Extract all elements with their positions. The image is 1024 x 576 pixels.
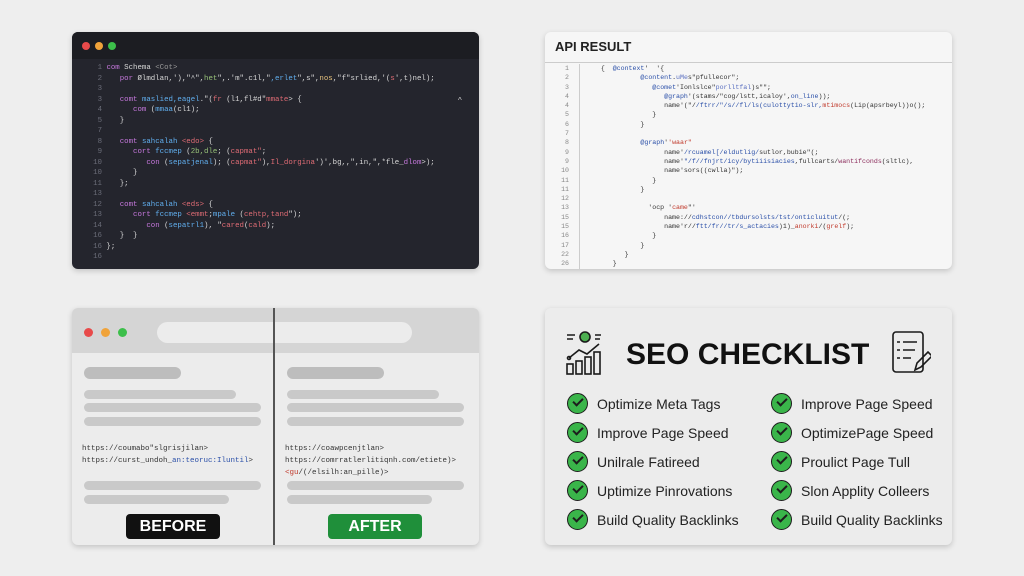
panel: API result: { @context' '{ @content.uMes"pfullecor"; @comet'Ionlslce"porlltfal)s""; @graph'(stams/"cog/lstt,icaloy',on_line)); name'("//ftrr/"/s//fl/ls(culottytio-slr,mtimocs(Lip(apsrbeyl))o(); } } @graph''waar" name'/rcuamel[/eldutlig/sutlor,bubie"(; name'"/f//fnjrt/icy/bytiiisiacies,fullcarts/wantifconds(sltlc), name'sors((cwlla)"); } } 'ocp 'came"' name://cdhstcon//tbdursolsts/tst/onticluitut/(; name'r//ftt/fr//tr/s_actacies)1)_anorki/(grelf); } } } } — [585, 65, 925, 267]
checklist left column: Build Quality Backlinks — [597, 512, 739, 528]
checklist right column: OptimizePage Speed — [801, 425, 933, 441]
panel: code editor: 1 2 3 3 4 5 7 8 9 10 10 11 13 12 13 14 16 16 16 — [93, 64, 102, 261]
panel: before/after browser — [72, 308, 479, 545]
after urls: https://coawpcenjtlan> https://comrratlerlitiqnh.com/etiete)> <gu/(/elsilh:an_pille)> — [285, 445, 456, 477]
browser top bar — [72, 308, 479, 353]
JSON code text — [561, 65, 925, 267]
panel: API result: 1 2 3 4 4 5 6 7 8 9 9 10 11 11 12 13 15 15 16 17 22 26 — [561, 65, 569, 267]
icon: clipboard with pencil — [892, 331, 931, 373]
checklist left column: Uptimize Pinrovations — [597, 483, 732, 499]
checklist right column: Build Quality Backlinks — [801, 512, 943, 528]
before label: BEFORE — [140, 518, 206, 535]
before column — [82, 367, 261, 539]
heading: API RESULT: API RESULT — [555, 39, 631, 54]
checklist right column: Improve Page Speed — [801, 396, 933, 412]
checklist right column — [771, 393, 943, 530]
checklist left column: Improve Page Speed — [597, 425, 729, 441]
window dots — [82, 42, 90, 50]
heading: SEO CHECKLIST: SEO CHECKLIST — [626, 338, 869, 371]
after column — [285, 367, 464, 539]
before label — [126, 514, 220, 539]
icon: analytics chart — [566, 331, 601, 375]
panel: code editor: ^ — [458, 96, 462, 105]
panel: code editor — [72, 32, 479, 269]
window dots — [84, 328, 93, 337]
panel: code editor: com Schema <Cot> por Ølmdlan,'),"^",het",.'m".c1l,",erlet",s",nos,"f"srlied,'(s',t)nel); comt maslied,eagel."(fr (l1,fl#d"mmate> { com (mmaa(cl1); } comt sahcalah <edo> { cort fccmep (2b,dle; (capmat"; con (sepatjenal); (capmat"),Il_dorgina')',bg,,",in,",*fle_dlom>); } }; comt sahcalah <eds> { cort fccmep <emmt;mpale (cehtp,tand"); con (sepatrl1), "cared(cald); } } }; — [102, 64, 435, 250]
checklist right column: Slon Applity Colleers — [801, 483, 929, 499]
checklist left column — [567, 393, 739, 530]
checklist right column: Proulict Page Tull — [801, 454, 910, 470]
checklist left column: Unilrale Fatireed — [597, 454, 700, 470]
before urls: https://coumabo"slgrisjilan> https://curst_undoh_an:teoruc:Iluntil> — [82, 445, 253, 465]
title bar — [72, 32, 479, 59]
checklist left column: Optimize Meta Tags — [597, 396, 720, 412]
url bar — [157, 322, 412, 343]
panel: SEO checklist — [545, 308, 952, 545]
code text — [93, 64, 435, 261]
after label — [328, 514, 422, 539]
after label: AFTER — [348, 518, 402, 535]
